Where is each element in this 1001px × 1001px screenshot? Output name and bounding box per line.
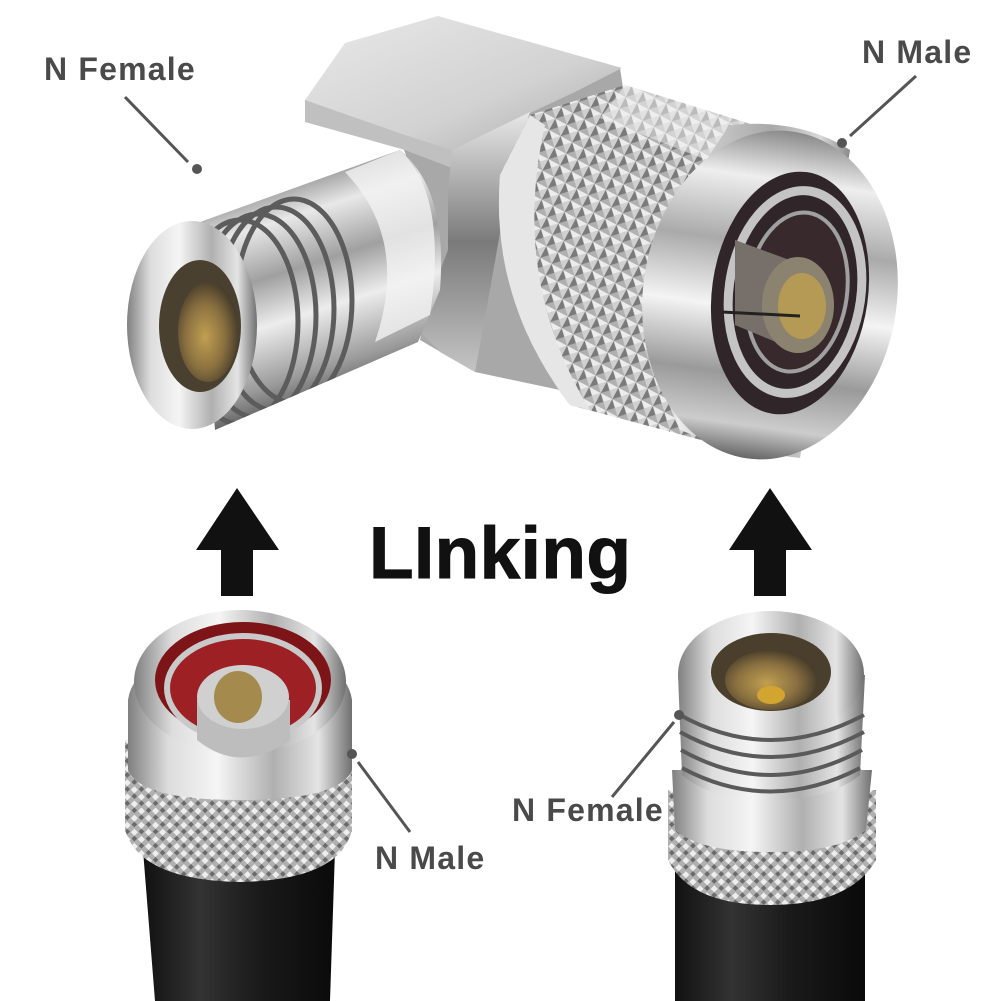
inner thread bbox=[167, 636, 319, 740]
black cable bbox=[675, 860, 865, 1001]
sleeve highlight band bbox=[600, 85, 770, 175]
female smooth collar highlight bbox=[345, 150, 435, 342]
female front ring bbox=[127, 221, 257, 429]
bottom right cable: N female connector bbox=[668, 611, 876, 1001]
bottom left cable: N male connector bbox=[125, 610, 352, 1001]
male opening bbox=[696, 161, 884, 425]
knurled base bbox=[668, 790, 876, 905]
heading: Linking: LInking bbox=[369, 513, 631, 594]
male knurled sleeve bbox=[499, 85, 770, 445]
top ring bbox=[678, 611, 864, 737]
leader line: N Female top left bbox=[125, 97, 202, 174]
male front ring bbox=[621, 114, 919, 476]
adapter base fill bbox=[400, 68, 640, 390]
thread section bbox=[678, 675, 865, 800]
label: N Female top left: N Female bbox=[44, 51, 196, 87]
leader line: N Male top right bbox=[837, 76, 916, 148]
centre contact bbox=[757, 686, 785, 704]
label: N Female bottom: N Female bbox=[512, 792, 664, 828]
smooth barrel bbox=[672, 770, 872, 852]
male front collar bbox=[654, 124, 850, 458]
left up arrow bbox=[196, 488, 279, 596]
male centre pin bbox=[735, 240, 795, 350]
centre pin bbox=[197, 700, 290, 758]
thread rings bbox=[680, 715, 864, 792]
top ring bbox=[134, 610, 346, 754]
adapter hexagonal elbow bbox=[418, 112, 530, 372]
female bore bbox=[159, 260, 241, 392]
main adapter: right angle N female to N male bbox=[127, 16, 919, 476]
adapter body front edge bbox=[305, 100, 452, 168]
female thread rings bbox=[214, 196, 354, 424]
leader line: N Female bottom bbox=[612, 710, 684, 797]
red interior bbox=[155, 622, 331, 738]
smooth collar bbox=[128, 650, 352, 800]
sleeve rear lip bbox=[499, 115, 590, 410]
adapter body top plate bbox=[305, 16, 622, 150]
leader line: N Male bottom bbox=[347, 749, 410, 832]
female connector barrel bbox=[127, 150, 441, 430]
knurled sleeve bbox=[125, 740, 352, 882]
male inner threads bbox=[715, 182, 875, 402]
label: N Male bottom: N Male bbox=[375, 840, 485, 876]
bore bbox=[711, 633, 831, 711]
black cable bbox=[143, 850, 335, 1001]
right up arrow bbox=[729, 488, 812, 596]
label: N Male top right: N Male bbox=[862, 34, 972, 70]
